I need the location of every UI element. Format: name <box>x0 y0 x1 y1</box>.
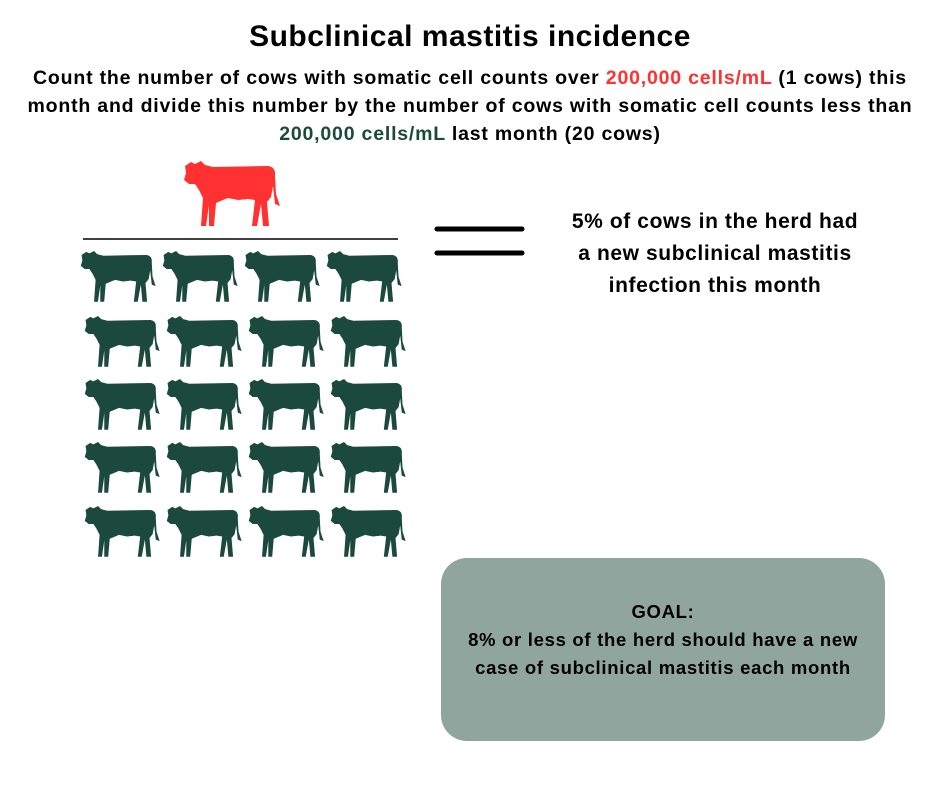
goal text <box>468 601 858 678</box>
result text: infection this month <box>609 274 821 297</box>
result text: 5% of cows in the herd had <box>572 210 858 233</box>
subtitle <box>28 67 912 145</box>
icon grid: 20 green cows <box>81 251 406 557</box>
subtitle: month and divide this number by the number of cows with somatic cell counts less than <box>28 95 912 117</box>
goal text: case of subclinical mastitis each month <box>475 657 851 678</box>
fraction line <box>83 238 398 240</box>
title: Subclinical mastitis incidence <box>249 20 691 53</box>
subtitle: Count the number of cows with somatic cell counts over 200,000 cells/mL (1 cows) this <box>33 67 907 89</box>
result text: a new subclinical mastitis <box>578 242 852 265</box>
icon: red cow numerator <box>184 161 280 226</box>
result text <box>572 210 858 297</box>
goal text: 8% or less of the herd should have a new <box>468 629 858 650</box>
equals sign <box>437 229 522 253</box>
goal box <box>441 558 885 741</box>
subtitle: 200,000 cells/mL last month (20 cows) <box>279 123 661 145</box>
goal text: GOAL: <box>631 601 695 622</box>
